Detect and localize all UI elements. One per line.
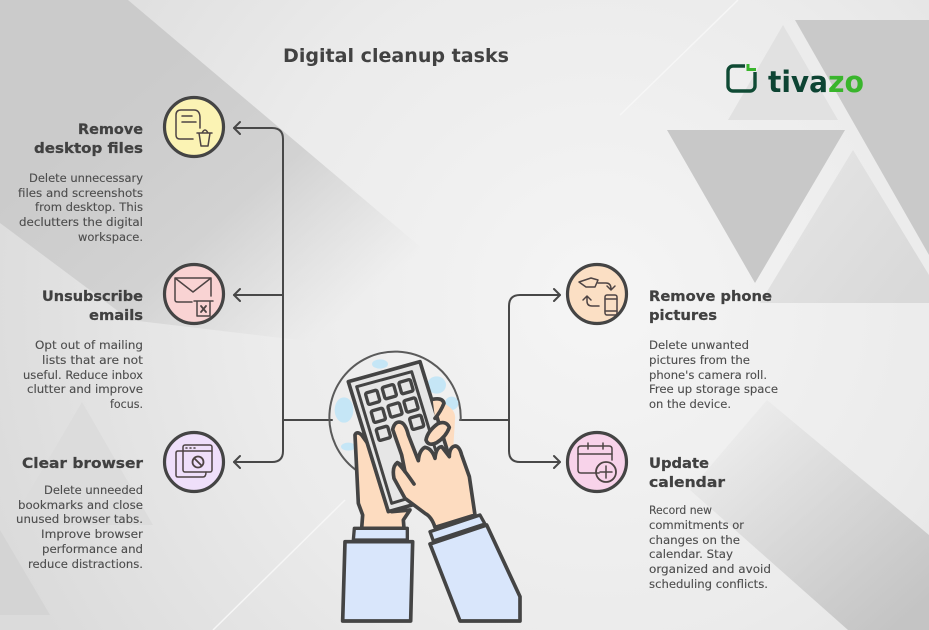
text: remove phone pictures: Remove phone: [649, 289, 772, 305]
text: clear browser: Delete unneeded: [44, 484, 143, 497]
text: remove phone pictures: pictures from the: [649, 354, 750, 367]
logo: tivazo: tiva: [768, 65, 828, 99]
text: unsubscribe emails: lists that are not: [42, 354, 144, 367]
text: update calendar: [649, 456, 771, 591]
central illustration: hands holding phone: [329, 352, 520, 621]
text: remove phone pictures: Delete unwanted: [649, 339, 749, 352]
text: unsubscribe emails: Unsubscribe: [42, 289, 143, 305]
icon: update calendar: [568, 432, 626, 492]
text: update calendar: Update: [649, 456, 709, 472]
text: remove desktop files: workspace.: [78, 231, 143, 244]
text: unsubscribe emails: emails: [89, 308, 143, 324]
text: remove phone pictures: on the device.: [649, 398, 731, 411]
text: remove desktop files: [18, 122, 143, 244]
text: clear browser: Clear browser: [22, 456, 144, 472]
text: unsubscribe emails: clutter and improve: [27, 383, 143, 396]
text: remove phone pictures: Free up storage space: [649, 383, 778, 396]
text: update calendar: scheduling conflicts.: [649, 578, 768, 591]
text: remove phone pictures: [649, 289, 778, 411]
text: remove desktop files: Delete unnecessary: [29, 172, 143, 185]
text: remove desktop files: desktop files: [34, 141, 143, 157]
icon: remove desktop files: [164, 98, 224, 156]
text: clear browser: [16, 456, 144, 571]
title: Digital cleanup tasks: [283, 45, 509, 67]
logo: tivazo: zo: [828, 65, 864, 99]
text: unsubscribe emails: focus.: [110, 398, 143, 411]
text: remove phone pictures: pictures: [649, 308, 717, 324]
icon: remove phone pictures: [568, 264, 626, 324]
text: remove phone pictures: phone's camera roll.: [649, 369, 767, 382]
text: clear browser: performance and: [42, 543, 143, 556]
text: update calendar: Record new: [649, 504, 712, 517]
icon: unsubscribe emails: [164, 264, 224, 324]
text: unsubscribe emails: [23, 289, 144, 411]
text: clear browser: reduce distractions.: [28, 558, 143, 571]
text: unsubscribe emails: useful. Reduce inbox: [23, 369, 143, 382]
connector lines and arrows: [234, 122, 560, 468]
text: remove desktop files: from desktop. This: [35, 201, 143, 214]
text: remove desktop files: Remove: [78, 122, 143, 138]
text: update calendar: organized and avoid: [649, 563, 771, 576]
text: unsubscribe emails: Opt out of mailing: [35, 339, 143, 352]
logo: tivazo: [728, 64, 864, 99]
text: update calendar: commitments or: [649, 519, 744, 532]
text: remove desktop files: declutters the digital: [19, 216, 143, 229]
decorative inverted triangle: [667, 130, 845, 283]
text: update calendar: changes on the: [649, 534, 740, 547]
icon: clear browser: [164, 432, 224, 492]
text: update calendar: calendar. Stay: [649, 548, 733, 561]
text: remove desktop files: files and screenshots: [18, 187, 143, 200]
text: update calendar: calendar: [649, 475, 726, 491]
text: clear browser: bookmarks and close: [18, 499, 143, 512]
text: clear browser: Improve browser: [41, 528, 143, 541]
text: clear browser: unused browser tabs.: [16, 513, 143, 526]
